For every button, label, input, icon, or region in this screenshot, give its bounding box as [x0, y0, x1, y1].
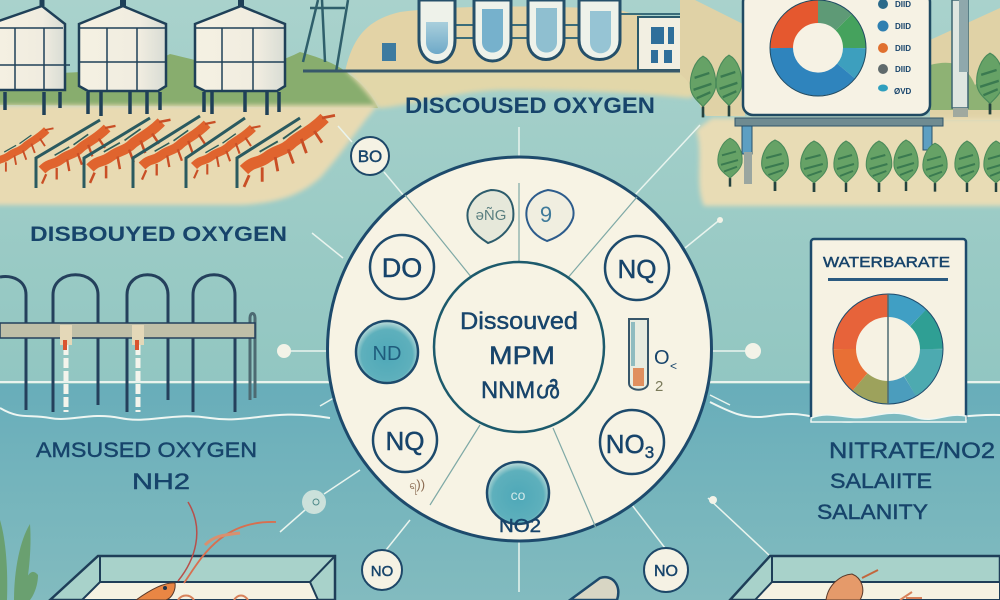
- legend: [878, 0, 912, 96]
- title rule: [828, 278, 948, 281]
- pipework: [456, 14, 685, 38]
- label: nitrate: NITRATE/NO2: [829, 438, 995, 463]
- panel: water rate board: [811, 239, 966, 422]
- panel: right shrimp tank: [730, 556, 1000, 600]
- raceway 2: [36, 120, 116, 188]
- heading: top: DISCOUSED OXYGEN: [405, 93, 655, 118]
- node: top right connector: [717, 217, 723, 223]
- badge: NQ top right: NQ: [618, 254, 656, 284]
- hub text: NNM: NNMൾ: [481, 377, 560, 404]
- legend: DIID: [895, 44, 911, 53]
- board title: WATERBARATE: [823, 254, 950, 271]
- badge: DO: [370, 235, 434, 299]
- label: NO2: NO2: [499, 516, 541, 536]
- legend: DIID: [895, 65, 911, 74]
- board waterline: [811, 413, 966, 422]
- badge: NO3: 3: [645, 443, 654, 462]
- badge: NQ top right: [605, 236, 669, 300]
- water tower: [303, 0, 348, 72]
- badge: teal lower: [487, 462, 549, 524]
- sand strip: [345, 70, 715, 108]
- badge: teal ND: [356, 321, 418, 383]
- node: lower left connector: [302, 490, 326, 514]
- small shrimp: [826, 570, 922, 600]
- water rate donut: [833, 294, 943, 404]
- label: O4 note: 2: [655, 378, 663, 395]
- label: O4 note: O: [654, 347, 670, 369]
- small note: ရ)): [409, 477, 425, 495]
- label: salaiite: SALAIITE: [830, 470, 932, 493]
- inner hub: [434, 262, 604, 432]
- node: left connector: [277, 344, 291, 358]
- icon: right top oval: 9: [540, 202, 552, 227]
- icon: right top oval: [526, 190, 574, 241]
- lab building: [638, 17, 685, 70]
- legend: DIID: [895, 0, 911, 9]
- top trees: [690, 53, 1000, 117]
- pipe arches: [0, 275, 255, 412]
- icon: central capsule: [570, 577, 618, 600]
- heading: left: DISBOUYED OXYGEN: [30, 223, 287, 246]
- node: lower right connector: [709, 496, 717, 504]
- label: amsused oxygen: AMSUSED OXYGEN: [36, 439, 257, 462]
- label: NH2: NH2: [132, 469, 190, 494]
- green hill: [0, 52, 378, 108]
- silo 3: [195, 0, 285, 115]
- shrimp: [136, 502, 276, 600]
- raceway 6: [237, 115, 335, 188]
- legend: ØVD: [894, 87, 912, 96]
- wheel dividers: [405, 183, 637, 528]
- badge: NQ lower left: NQ: [386, 426, 424, 456]
- plants: [0, 520, 38, 600]
- callout: bottom right NO: NO: [654, 563, 678, 580]
- legend: DIID: [895, 22, 911, 31]
- lower sand field: [696, 118, 1000, 206]
- sea water: [0, 382, 1000, 600]
- sand hill: [345, 6, 690, 72]
- raceway 5: [186, 118, 260, 188]
- badge: teal lower: co: [511, 487, 526, 503]
- callout: BO: [351, 137, 389, 175]
- ground line: [303, 70, 688, 72]
- hub text: Dissouved: Dissouved: [460, 308, 578, 335]
- callout: BO: BO: [358, 147, 382, 166]
- connector lines: [280, 125, 770, 592]
- badge: NQ lower left: [373, 408, 437, 472]
- panel: left shrimp tank: [50, 502, 335, 600]
- callout: bottom right NO: [644, 548, 688, 592]
- badge: DO: DO: [382, 253, 422, 283]
- table: [735, 118, 943, 184]
- sand hills: [680, 0, 1000, 120]
- sensor 2: [132, 325, 144, 412]
- outer disc: [328, 157, 712, 541]
- icon: left top oval: ǝÑG: [476, 207, 506, 224]
- panel: pipe rack in water: [0, 275, 255, 412]
- panel: central parameter wheel: [328, 157, 712, 541]
- board: [743, 0, 930, 115]
- panel: dashboard board with trees: [680, 0, 1000, 206]
- panel: silos and shrimp raceways: [0, 0, 378, 205]
- sensor 1: [60, 325, 72, 412]
- icon: left top oval: [467, 190, 513, 243]
- tube 3: [528, 0, 564, 60]
- green bushes: [930, 63, 1000, 110]
- badge: NO3: NO: [606, 429, 645, 459]
- badge: NO3: [600, 410, 664, 474]
- sand bank: [0, 105, 378, 205]
- callout: bottom left NO: NO: [371, 563, 393, 580]
- tube 1: [419, 0, 455, 62]
- label: O4 note: [654, 347, 677, 395]
- label: O4 note: <: [670, 359, 677, 373]
- raceway 3: [84, 118, 170, 188]
- silo 1: [0, 0, 70, 115]
- panel: laboratory tubes building: [303, 0, 715, 108]
- tube 4: [579, 0, 620, 60]
- donut chart: [770, 0, 866, 96]
- silo 2: [79, 0, 166, 116]
- column: [952, 0, 968, 117]
- bottom trees: [718, 138, 1000, 192]
- raceway 4: [133, 116, 216, 188]
- badge: teal ND: ND: [373, 343, 401, 365]
- node: right connector: [745, 343, 761, 359]
- tube 2: [474, 0, 511, 61]
- horizontal bar: [0, 323, 255, 338]
- small window: [382, 43, 396, 61]
- hub text: MPM: MPM: [489, 342, 555, 370]
- callout: bottom left NO: [362, 550, 402, 590]
- raceway 1: [0, 128, 54, 175]
- icon: test tube: [629, 319, 648, 390]
- label: salanity: SALANITY: [817, 501, 928, 524]
